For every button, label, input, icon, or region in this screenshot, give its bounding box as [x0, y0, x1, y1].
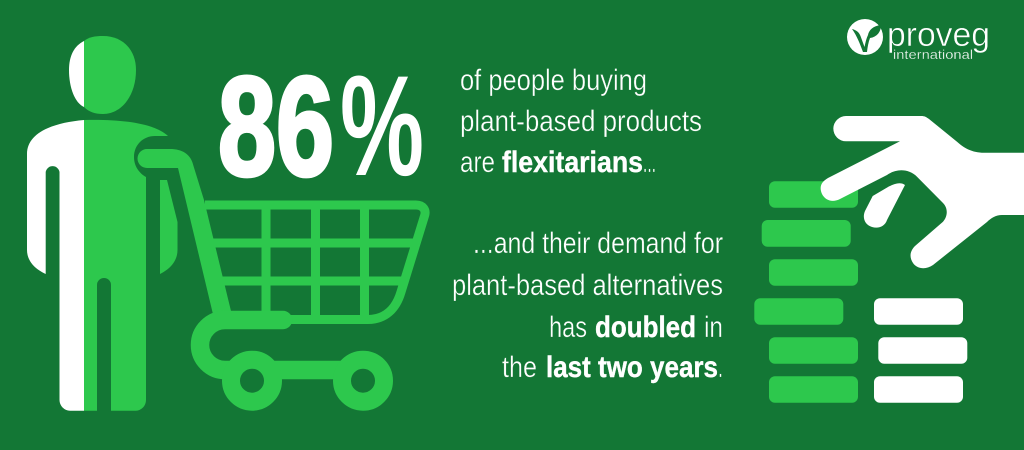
text block: demand statement: the: [502, 351, 537, 384]
text block: flexitarians statement: of people buying: [460, 64, 647, 97]
cart basket outline: [205, 205, 425, 320]
icon: green stacked blocks: [754, 181, 858, 403]
person body white half: [27, 120, 84, 411]
icon: shopping cart: [138, 149, 425, 402]
text block: flexitarians statement: [460, 64, 702, 179]
logo: proveg international: [847, 16, 990, 62]
text block: flexitarians statement: are: [460, 146, 495, 179]
text block: flexitarians statement: flexitarians: [502, 146, 643, 179]
text block: demand statement: [452, 227, 723, 384]
logo wordmark: proveg: [887, 16, 990, 54]
cart lower frame: [200, 320, 283, 370]
text block: demand statement: ...and their demand for: [473, 227, 723, 260]
text block: demand statement: has: [549, 311, 587, 344]
cart basket grid: [213, 205, 414, 319]
text block: demand statement: doubled: [595, 311, 696, 344]
icon: person half white half green: [27, 36, 178, 411]
cart right wheel: [342, 360, 384, 402]
hand: [821, 116, 1024, 268]
cart handle and frame: [138, 149, 231, 313]
headline number: %: [340, 47, 424, 206]
logo subline: international: [893, 47, 973, 62]
cart left wheel: [231, 360, 273, 402]
logo mark: [847, 19, 883, 55]
text block: flexitarians statement: ...: [643, 146, 656, 179]
person body green half: [84, 120, 168, 411]
cart wheel axle: [270, 361, 345, 379]
person right arm: [160, 180, 178, 274]
text block: demand statement: .: [718, 351, 723, 384]
text block: demand statement: plant-based alternatives: [452, 269, 723, 302]
text block: demand statement: last two years: [546, 351, 718, 384]
text block: flexitarians statement: plant-based products: [460, 105, 702, 138]
person head: [69, 36, 136, 114]
headline number: 86: [218, 47, 334, 205]
icon: hand picking a block: [821, 116, 1024, 268]
text block: demand statement: in: [704, 311, 723, 344]
hand gap shape: [864, 183, 905, 228]
icon: white stacked blocks: [874, 298, 967, 403]
